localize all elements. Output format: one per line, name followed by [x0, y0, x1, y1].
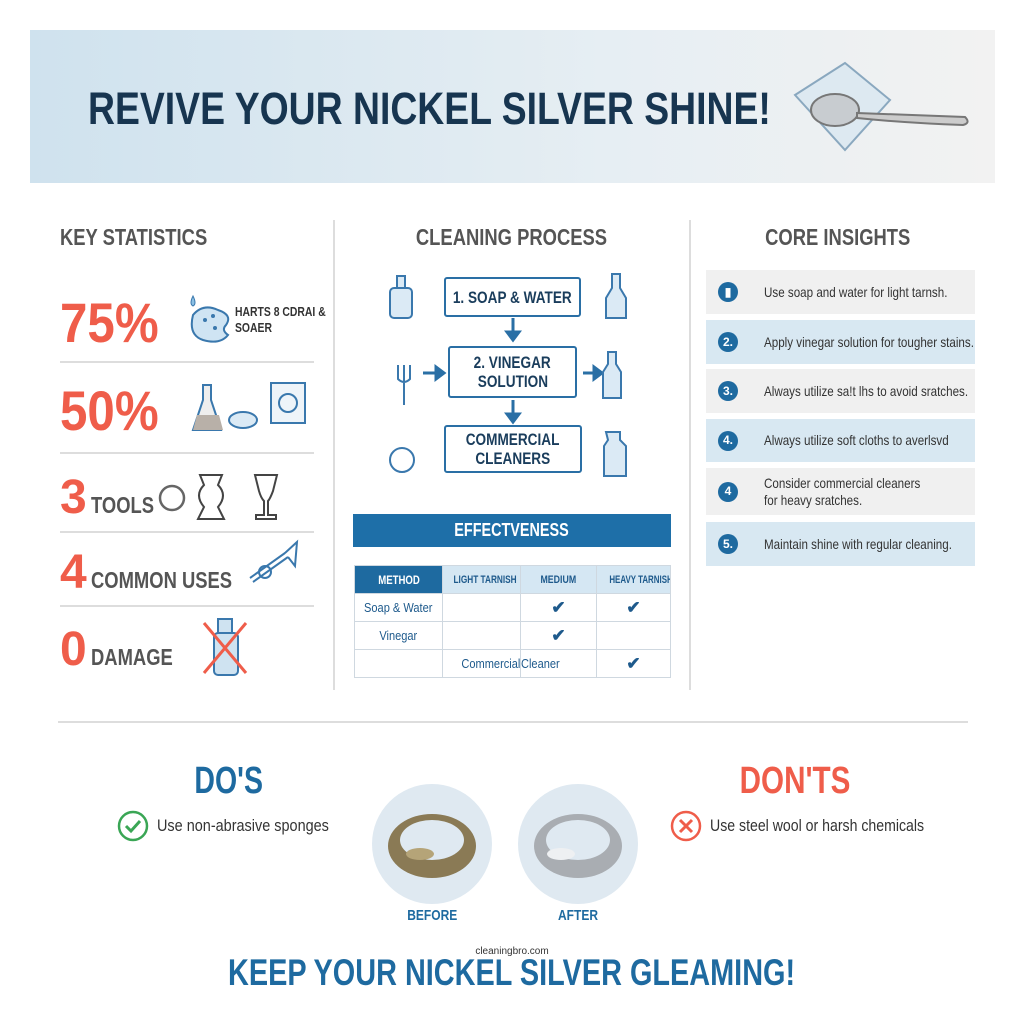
icon: trumpet — [250, 540, 298, 583]
insight 3 — [706, 369, 975, 413]
insight 6: 5. — [723, 536, 733, 550]
stat 3 tools: TOOLS — [91, 492, 154, 518]
insight 1 — [706, 270, 975, 314]
stat label — [235, 304, 326, 335]
heading: DO'S — [195, 760, 263, 802]
heading: CLEANING PROCESS — [416, 224, 607, 250]
insight 1: Use soap and water for light tarnsh. — [764, 284, 947, 300]
labels: BEFORE — [407, 907, 457, 924]
stat 75%: 75% — [60, 291, 159, 354]
stat 0 damage: DAMAGE — [91, 644, 173, 670]
stat 4 common uses — [60, 546, 232, 599]
insight 4 — [706, 419, 975, 462]
stat 3 tools: 3 — [60, 471, 87, 524]
footer title: KEEP YOUR NICKEL SILVER GLEAMING! — [228, 952, 796, 993]
icon: sponge — [190, 295, 230, 343]
arrows — [423, 318, 602, 424]
before/after rings — [372, 784, 638, 924]
before/after rings: AFTER — [558, 907, 598, 924]
heading: KEY STATISTICS — [60, 224, 207, 250]
heading: DON'TS — [740, 760, 851, 802]
icon: spoon on cloth — [794, 62, 969, 152]
insight 5: Consider commercial cleaners — [764, 474, 920, 490]
title: REVIVE YOUR NICKEL SILVER SHINE! — [88, 83, 771, 134]
effectiveness table: LIGHT TARNISH — [454, 574, 517, 586]
effectiveness table: Soap & Water — [364, 600, 433, 615]
stat 4 common uses: 4 — [60, 546, 87, 599]
header banner — [30, 30, 995, 183]
effectiveness table: ✔ — [551, 598, 566, 616]
heading: CORE INSIGHTS — [765, 224, 910, 250]
don'ts section — [670, 760, 924, 842]
effectiveness bar — [353, 514, 671, 547]
insight 2: 2. — [723, 334, 733, 348]
effectiveness table: ✔ — [626, 598, 641, 616]
insight 5: for heavy sratches. — [764, 492, 862, 508]
cross item — [670, 810, 924, 842]
effectiveness table — [354, 565, 671, 678]
step 1 box — [444, 277, 581, 317]
effectiveness table: METHOD — [378, 572, 419, 586]
insight 2: Apply vinegar solution for tougher stains. — [764, 334, 974, 350]
effectiveness table: MEDIUM — [541, 574, 576, 586]
insight 6 — [706, 522, 975, 566]
insight 4: Always utilize soft cloths to averlsvd — [764, 432, 949, 448]
stat 4 common uses: COMMON USES — [91, 567, 232, 593]
step 2 box: 2. VINEGAR — [474, 353, 551, 372]
check item — [118, 810, 329, 842]
stat 50%: 50% — [60, 379, 159, 442]
effectiveness table: Commercial — [461, 656, 520, 671]
stat 0 damage — [60, 623, 173, 676]
after ring — [518, 784, 638, 904]
stat 0 damage: 0 — [60, 623, 87, 676]
before ring — [372, 784, 492, 904]
step 1 box: 1. SOAP & WATER — [453, 288, 572, 306]
insight 3: 3. — [723, 384, 733, 398]
insight 5 — [706, 468, 975, 515]
cross item: Use steel wool or harsh chemicals — [710, 816, 924, 835]
step 3 box — [444, 425, 582, 473]
do's section — [118, 760, 329, 842]
column dividers — [333, 220, 335, 690]
step 3 box: COMMERCIAL — [466, 430, 560, 449]
step 2 box — [448, 346, 577, 398]
effectiveness bar: EFFECTVENESS — [455, 520, 569, 540]
stat label: HARTS 8 CDRAI & — [235, 304, 326, 319]
check item: Use non-abrasive sponges — [157, 816, 329, 835]
effectiveness table: ✔ — [626, 654, 641, 672]
step 3 box: CLEANERS — [476, 449, 550, 468]
panel: key statistics — [60, 224, 326, 676]
icon: cleaning supplies — [192, 382, 306, 431]
insight 5: 4 — [725, 484, 731, 498]
effectiveness table: ✔ — [551, 626, 566, 644]
icon: crossed spray bottle — [202, 618, 248, 676]
insight 6: Maintain shine with regular cleaning. — [764, 536, 952, 552]
stat label: SOAER — [235, 320, 272, 335]
effectiveness table: Vinegar — [380, 628, 417, 643]
step 2 box: SOLUTION — [477, 372, 548, 391]
insight 4: 4. — [723, 433, 733, 447]
stat 3 tools — [60, 471, 154, 524]
icon: ring and vases — [158, 474, 278, 520]
insight 3: Always utilize sa!t lhs to avoid sratches. — [764, 382, 968, 398]
insight 2 — [706, 320, 975, 364]
watermark: cleaningbro.com — [475, 946, 549, 957]
panel: cleaning process — [353, 224, 671, 678]
insight 1: ▮ — [725, 284, 731, 298]
icons: bottles, fork, ring, spray — [389, 273, 627, 477]
effectiveness table: Cleaner — [521, 656, 560, 671]
